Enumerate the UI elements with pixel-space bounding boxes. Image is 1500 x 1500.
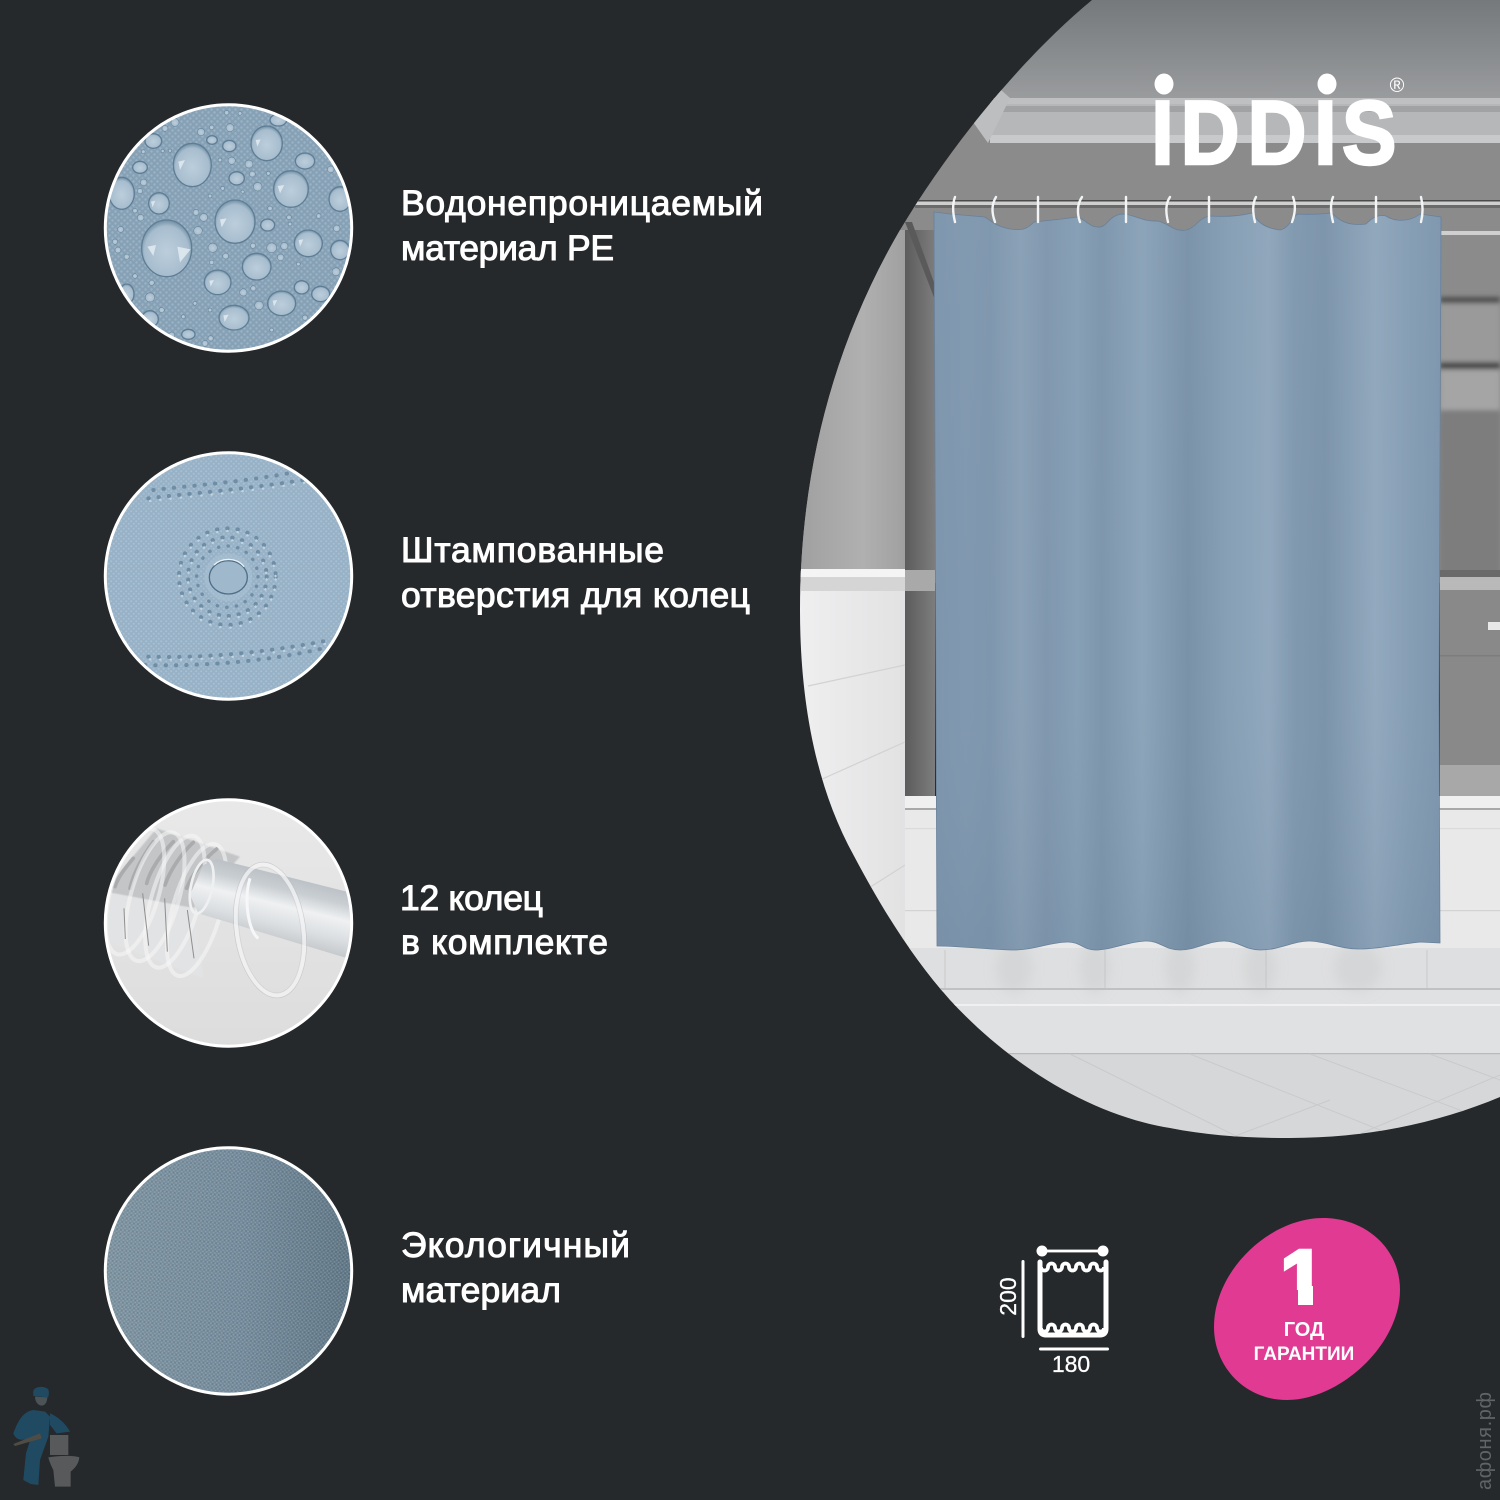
feature 4: eco material	[100, 1143, 630, 1403]
right wall rail	[1440, 570, 1500, 796]
photo circle: water drops	[100, 100, 360, 360]
text: Водонепроницаемый	[401, 183, 763, 223]
logo: IDDIS: ®	[1390, 75, 1405, 97]
feature 2: stamped holes	[100, 448, 750, 708]
curtain rod	[915, 200, 1500, 235]
text: отверстия для колец	[401, 575, 750, 615]
text: материал РЕ	[401, 228, 614, 268]
logo: IDDIS: IDDIS	[1151, 83, 1397, 184]
badge: 1 year warranty: ГАРАНТИИ	[1254, 1344, 1354, 1365]
icon: curtain size 180x200: 180	[1052, 1351, 1090, 1377]
photo circle: eyelet	[100, 448, 360, 708]
badge: 1 year warranty: ГОД	[1284, 1319, 1324, 1341]
curtain rings	[953, 197, 1422, 222]
icon: curtain size 180x200	[995, 1246, 1109, 1377]
feature 1: waterproof	[100, 100, 763, 360]
text: в комплекте	[401, 922, 608, 962]
text: материал	[401, 1270, 561, 1310]
badge: 1 year warranty: 1	[1281, 1233, 1324, 1322]
photo: bathroom scene with curtain	[800, 0, 1500, 1143]
floor and skirting	[942, 990, 1500, 1138]
curtain shadow	[1002, 950, 1376, 986]
ceiling	[994, 0, 1500, 99]
watermark: afonya: афоня.рф	[1474, 1392, 1496, 1490]
icon: plumber with toilet	[13, 1387, 79, 1487]
badge: 1 year warranty	[1214, 1218, 1400, 1400]
text: Штампованные	[401, 530, 664, 570]
photo circle: fabric texture	[100, 1143, 360, 1403]
shower curtain	[934, 212, 1441, 950]
cornice molding	[973, 90, 1500, 143]
icon: curtain size 180x200: 200	[995, 1277, 1021, 1316]
feature 3: rings	[94, 795, 608, 1055]
photo circle: rings on a rod	[94, 795, 360, 1055]
back wall	[800, 98, 1500, 796]
text: Экологичный	[401, 1225, 630, 1265]
text: 12 колец	[400, 878, 543, 918]
bathtub	[905, 796, 1500, 992]
left tiled wall	[800, 569, 935, 942]
